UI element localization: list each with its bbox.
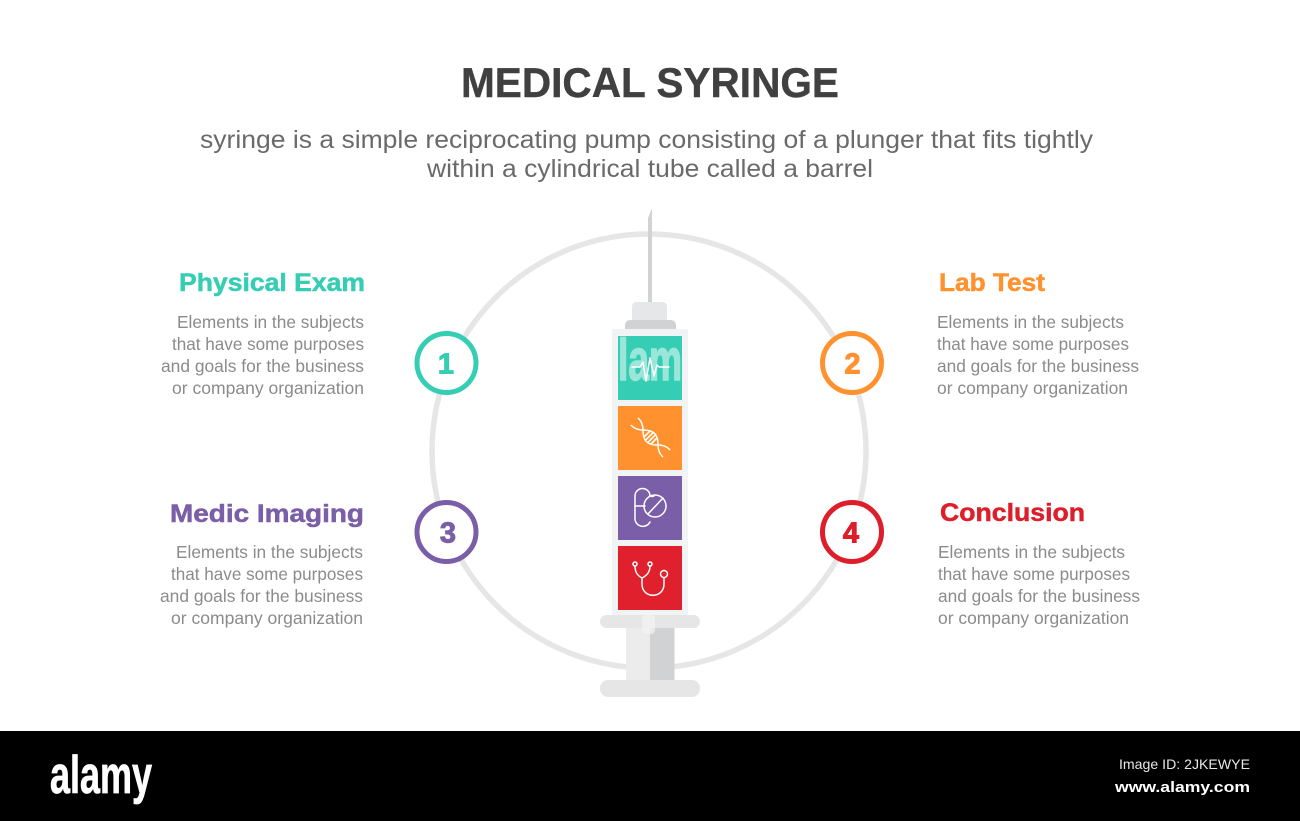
body text: Elements in the subjects [176,542,363,562]
panel: Physical Exam [161,269,365,398]
plunger rod [626,628,674,681]
body text: that have some purposes [171,564,363,584]
step 4 badge: 4 [843,518,859,550]
body text: and goals for the business [160,586,363,606]
body text: that have some purposes [172,334,364,354]
watermark letters: lam [618,328,682,393]
step 2 badge [822,334,882,392]
step 1 badge [417,334,476,392]
segment 1: teal with heartbeat icon [618,328,682,400]
body text [937,312,1139,398]
panel: Lab Test [937,269,1139,398]
footer band [0,731,1300,821]
needle hub [632,302,667,320]
barrel shoulder [625,320,676,329]
watermark smudge on flange [642,615,655,634]
body text: or company organization [171,608,363,628]
heading: Medic Imaging [170,500,364,528]
footer logo: alamy [50,746,152,805]
subtitle [200,126,1094,183]
subtitle: syringe is a simple reciprocating pump consisting of a plunger that fits tightly [200,126,1094,154]
body text: and goals for the business [938,586,1140,606]
icon: heartbeat [632,358,669,381]
syringe [600,208,700,697]
body text: that have some purposes [938,564,1130,584]
panel: Conclusion [938,499,1140,628]
ring behind syringe [432,234,866,668]
body text: or company organization [937,378,1128,398]
body text: Elements in the subjects [177,312,364,332]
body text [161,312,364,398]
body text [938,542,1140,628]
step 2 badge: 2 [844,348,861,380]
heading: Physical Exam [179,269,365,297]
plunger thumb rest [600,680,700,697]
flange [600,615,700,628]
body text: that have some purposes [937,334,1129,354]
heading: Conclusion [940,499,1085,527]
panel: Medic Imaging [160,500,364,628]
body text: or company organization [172,378,364,398]
heading: Lab Test [939,269,1046,297]
title: MEDICAL SYRINGE [461,59,839,106]
body text: and goals for the business [161,356,364,376]
icon: stethoscope [633,562,668,595]
body text: and goals for the business [937,356,1139,376]
body text: or company organization [938,608,1129,628]
step 1 badge: 1 [438,348,454,380]
barrel [612,329,688,615]
step 4 badge [822,502,882,562]
icon: pills [635,489,666,526]
body text: Elements in the subjects [938,542,1125,562]
segment 3: purple with pills icon [618,476,682,540]
website: www.alamy.com [1114,779,1250,796]
image id: Image ID: 2JKEWYE [1119,756,1250,772]
subtitle: within a cylindrical tube called a barrel [426,155,873,183]
icon: DNA helix [631,418,670,457]
segment 2: orange with DNA icon [618,406,682,470]
step 3 badge: 3 [440,518,456,550]
step 3 badge [417,502,476,562]
segment 4: red with stethoscope icon [618,546,682,610]
body text: Elements in the subjects [937,312,1124,332]
needle [648,208,652,302]
body text [160,542,363,628]
